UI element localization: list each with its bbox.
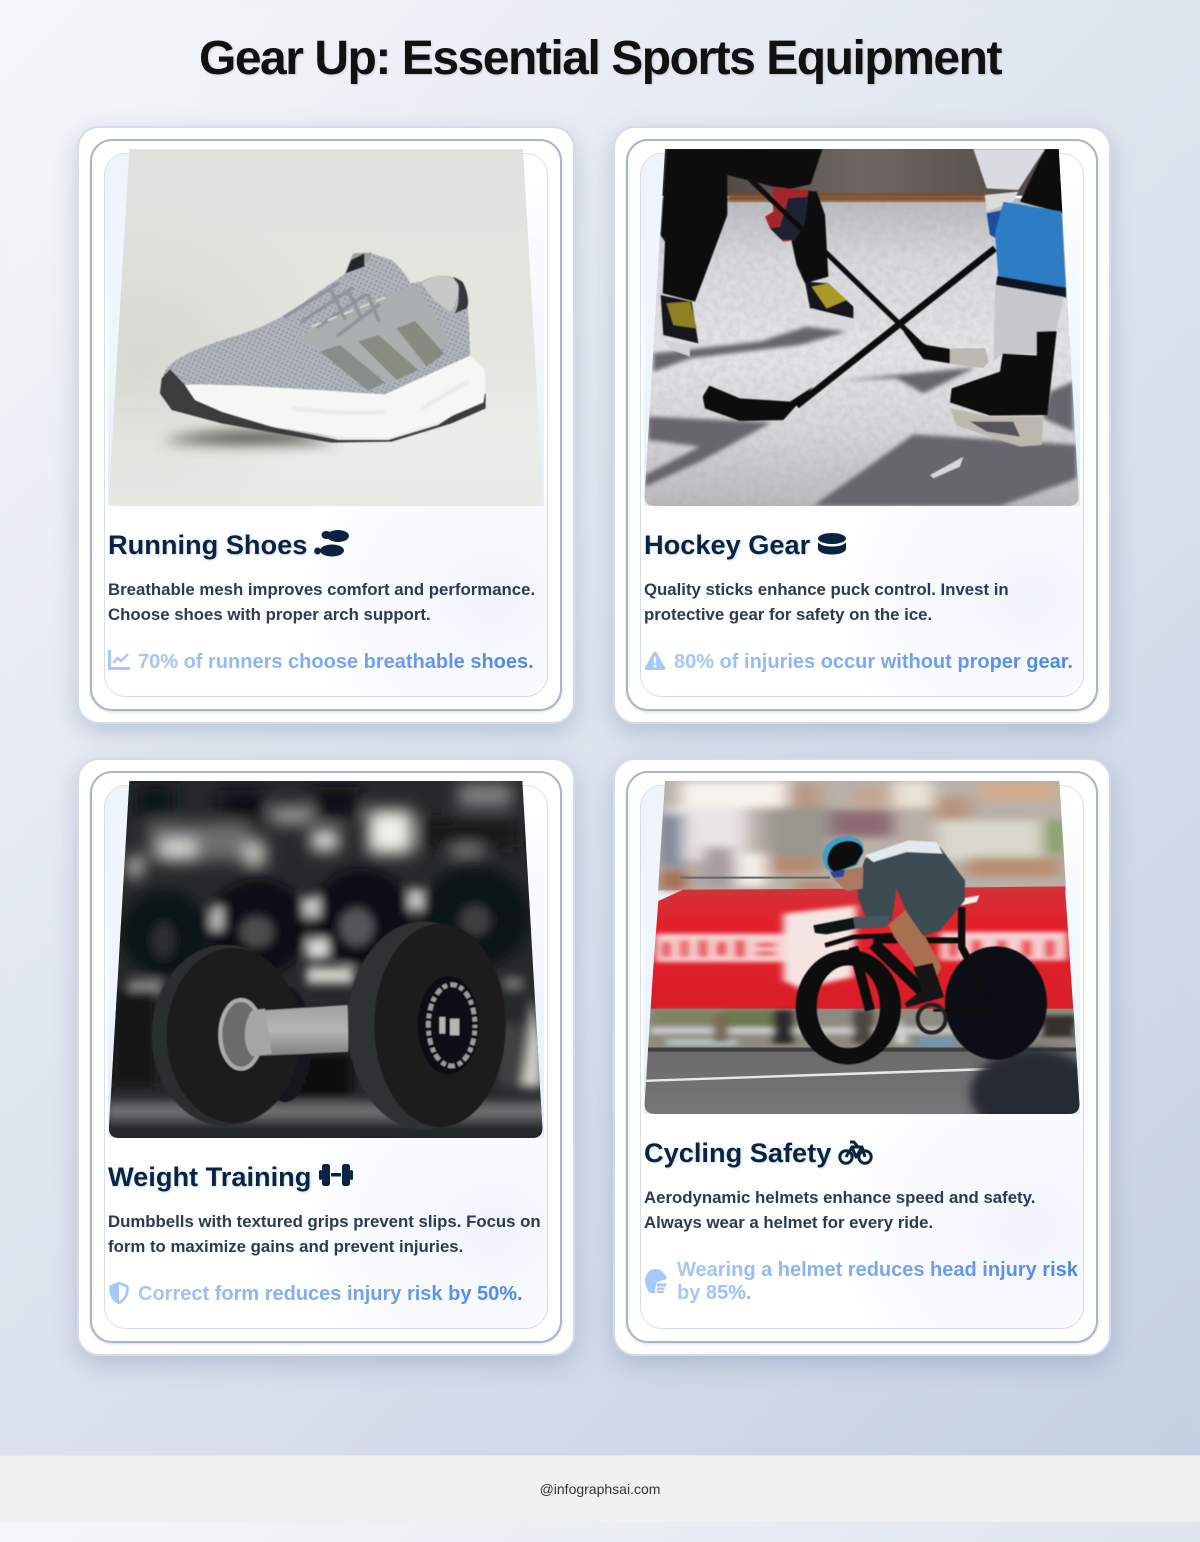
glove: [765, 188, 808, 242]
photo: dumbbell: [108, 781, 542, 1138]
right player: [973, 149, 1045, 190]
icon: shield: [109, 1282, 129, 1304]
icon: dumbbell: [319, 1164, 353, 1186]
title: Gear Up: Essential Sports Equipment: [199, 32, 1001, 85]
icon: warning triangle: [644, 652, 666, 670]
left plate: [278, 986, 312, 1102]
photo: time trial cyclist: [644, 781, 1080, 1114]
icon: hockey puck: [818, 533, 846, 554]
panel: hockey gear: [613, 126, 1111, 724]
panel: weight training: [77, 758, 575, 1356]
panel: running shoes: [77, 126, 575, 724]
sticks: [748, 180, 923, 344]
icon: shoe prints: [314, 530, 349, 556]
photo: running shoe: [109, 149, 543, 506]
rider: [888, 909, 942, 984]
stat: cycling safety: Wearing a helmet reduces head injury risk by 85%.: [677, 1259, 1078, 1304]
frame: [825, 907, 1003, 1010]
icon: safety helmet: [645, 1269, 667, 1293]
icon: line chart: [108, 650, 130, 670]
stat: weight training: Correct form reduces injury risk by 50%.: [138, 1283, 523, 1305]
description: weight training: Dumbbells with textured grips prevent slips. Focus on form to maximize gains and prevent injuries.: [108, 1212, 541, 1256]
stat: hockey gear: 80% of injuries occur without proper gear.: [674, 651, 1073, 673]
photo: hockey sticks on ice: [644, 149, 1079, 506]
panel: cycling safety: [613, 758, 1111, 1356]
description: running shoes: Breathable mesh improves comfort and performance. Choose shoes with proper arch support.: [108, 580, 535, 624]
heading: cycling safety: Cycling Safety: [644, 1137, 831, 1168]
handle: [260, 1004, 350, 1056]
footer: [0, 1455, 1200, 1522]
heading: running shoes: Running Shoes: [108, 529, 307, 560]
heading: weight training: Weight Training: [108, 1161, 311, 1192]
heading: hockey gear: Hockey Gear: [644, 529, 810, 560]
left player: [661, 149, 828, 302]
footer: @infographsai.com: [540, 1481, 660, 1497]
stat: running shoes: 70% of runners choose breathable shoes.: [138, 651, 534, 673]
right plate: [347, 921, 499, 1129]
icon: bicycle: [838, 1140, 873, 1165]
description: hockey gear: Quality sticks enhance puck control. Invest in protective gear for safety on the ice.: [644, 580, 1009, 624]
description: cycling safety: Aerodynamic helmets enhance speed and safety. Always wear a helmet for every ride.: [644, 1188, 1035, 1232]
wheels: [796, 950, 901, 1064]
